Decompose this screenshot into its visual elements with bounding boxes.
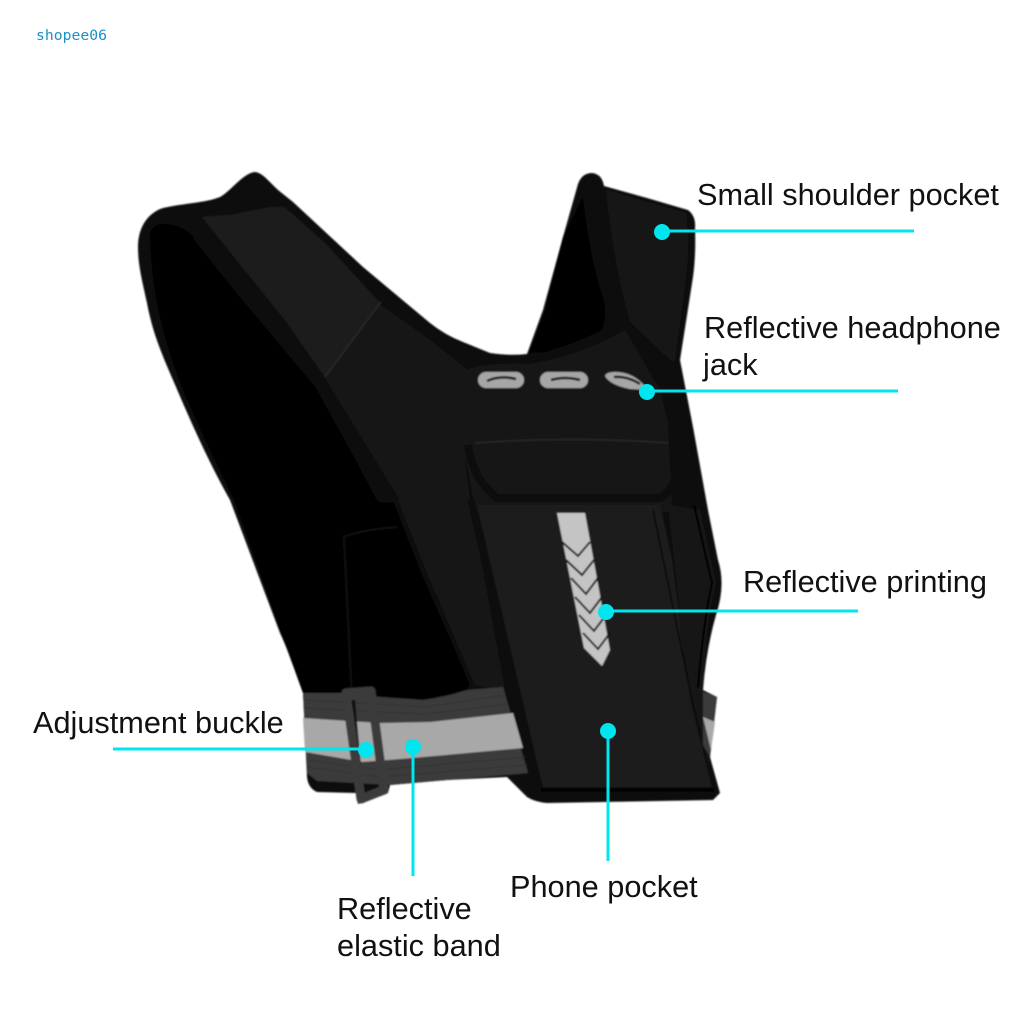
inner lining: right strap back (529, 196, 605, 353)
strap continuation to band (398, 500, 505, 690)
reflective headphone slots (478, 372, 648, 390)
callout: reflective printing (598, 564, 987, 620)
left shoulder pocket (202, 207, 380, 377)
phone pocket seam (653, 510, 713, 787)
strap binding along lining (197, 236, 475, 685)
leader line (412, 747, 414, 876)
pocket flap outer binding (468, 430, 677, 498)
leader line (113, 748, 366, 750)
phone pocket panel (477, 505, 713, 787)
callout: phone pocket (510, 723, 698, 904)
flap fold line (475, 440, 668, 443)
marker (358, 742, 374, 758)
slot 3 (605, 372, 648, 390)
label: Reflective (337, 891, 472, 926)
watermark: shopee06: shopee06 (36, 28, 107, 44)
vest silhouette (138, 172, 722, 804)
slot openings (487, 377, 640, 384)
label: Phone pocket (510, 869, 698, 904)
right edge inner line (694, 505, 712, 688)
inner pocket seam (344, 527, 397, 700)
right shoulder panel (606, 190, 688, 362)
label: Reflective printing (743, 564, 987, 599)
marker (639, 384, 655, 400)
right band end (703, 692, 717, 757)
marker (600, 723, 616, 739)
pocket right panel (668, 505, 716, 785)
phone pocket left binding (471, 500, 537, 785)
label: jack (702, 347, 758, 382)
right band stripe (703, 717, 715, 750)
vest illustration (138, 172, 722, 804)
reflective printing chevrons (557, 513, 610, 666)
elastic band reflective stripe (303, 713, 523, 762)
chevron strip (557, 513, 610, 666)
marker (598, 604, 614, 620)
callout: small shoulder pocket (654, 177, 999, 240)
left shoulder pocket seam (325, 302, 381, 377)
front chest panel (462, 330, 672, 512)
marker (654, 224, 670, 240)
adjustment buckle (346, 691, 384, 799)
chest strap panel (325, 305, 470, 500)
callout: reflective headphone jack (639, 310, 1001, 400)
leader line (662, 230, 914, 232)
leader line (647, 390, 898, 392)
label: Reflective headphone (704, 310, 1001, 345)
inner lining (150, 224, 470, 700)
leader line (606, 610, 858, 612)
label: Adjustment buckle (33, 705, 284, 740)
chevron lines (562, 542, 610, 649)
callout: reflective elastic band (337, 739, 501, 963)
buckle frame (346, 691, 384, 799)
elastic band dark webbing (303, 687, 528, 785)
slot 1 (478, 372, 524, 388)
label: elastic band (337, 928, 501, 963)
phone pocket lower binding (541, 788, 714, 792)
elastic band (303, 687, 717, 785)
top edge binding (272, 192, 622, 361)
leader line (606, 731, 610, 861)
marker (405, 739, 421, 755)
slot 2 (540, 372, 588, 388)
callout: adjustment buckle (33, 705, 374, 758)
label: Small shoulder pocket (697, 177, 999, 212)
inner lining: deep pocket (346, 529, 468, 698)
right strap binding (594, 176, 684, 430)
buckle slit (353, 700, 361, 788)
elastic band ribs (304, 695, 527, 777)
